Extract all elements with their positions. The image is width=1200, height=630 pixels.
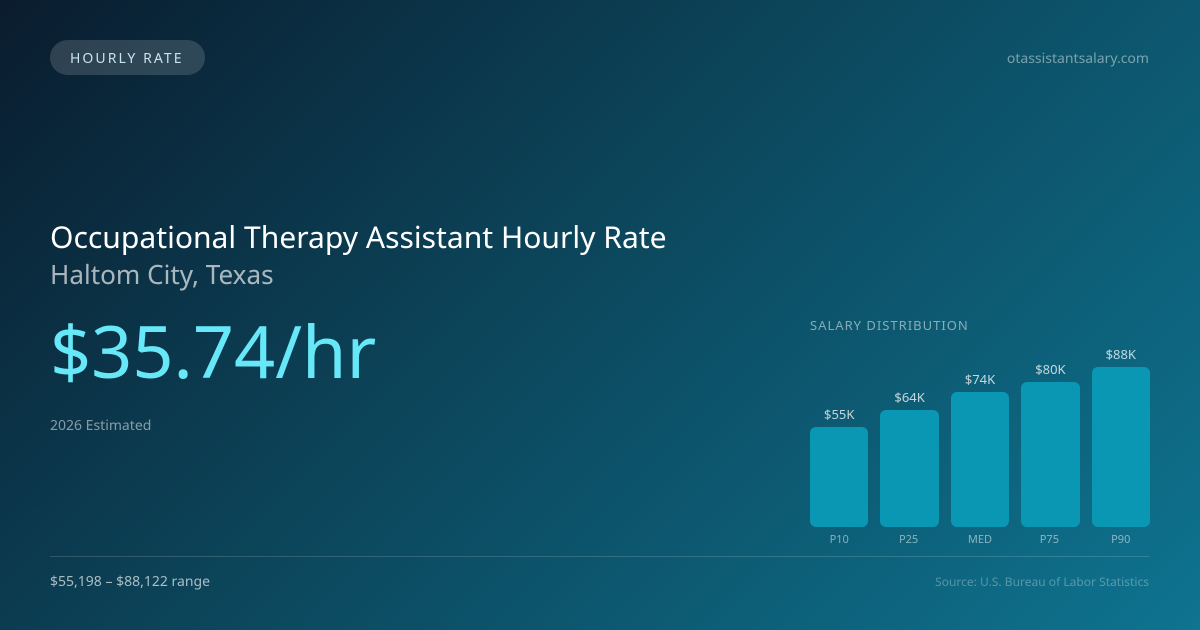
value P25: $64K <box>894 388 925 406</box>
bar P25 <box>880 410 939 527</box>
badge: hourly rate <box>50 40 205 75</box>
value P75: $80K <box>1035 360 1066 378</box>
title: Occupational Therapy Assistant Hourly Rate <box>50 216 667 257</box>
label P10: P10 <box>830 532 849 547</box>
bar median <box>951 392 1009 527</box>
main figure: hourly rate: $35.74/hr <box>50 302 376 400</box>
subtitle: location: Haltom City, Texas <box>50 256 274 292</box>
site url: otassistantsalary.com <box>1007 49 1149 68</box>
footer: salary range: $55,198 – $88,122 range <box>50 572 210 591</box>
badge: hourly rate: HOURLY RATE <box>70 49 184 68</box>
value P10: $55K <box>824 405 854 423</box>
value P90: $88K <box>1106 345 1136 363</box>
label P90: P90 <box>1111 532 1130 547</box>
footer: source: Source: U.S. Bureau of Labor Statistics <box>935 573 1149 590</box>
value median: $74K <box>965 370 995 388</box>
label P25: P25 <box>899 532 918 547</box>
label P75: P75 <box>1040 532 1059 547</box>
bar P90 <box>1092 367 1150 527</box>
note: estimate year: 2026 Estimated <box>50 416 151 435</box>
chart: salary distribution <box>810 316 1150 547</box>
label median: MED <box>968 532 992 547</box>
bar P10 <box>810 427 868 527</box>
bar P75 <box>1021 382 1080 527</box>
chart heading: SALARY DISTRIBUTION <box>810 316 969 334</box>
